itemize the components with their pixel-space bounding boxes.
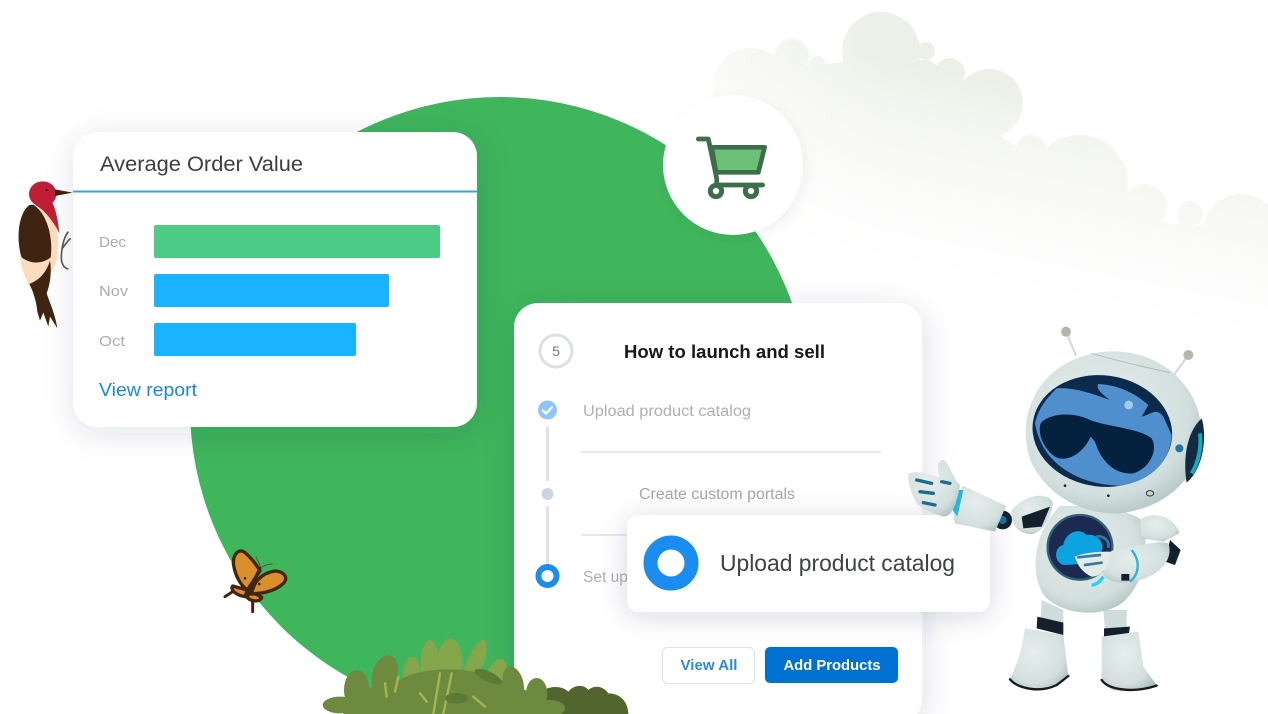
bar chart: Oct xyxy=(99,333,126,350)
robot raised arm xyxy=(908,460,1053,534)
bush xyxy=(323,638,628,714)
icon: butterfly xyxy=(225,551,286,612)
card title: Average Order Value xyxy=(100,153,303,176)
robot antennas xyxy=(1061,327,1193,375)
timeline connector xyxy=(546,427,549,566)
robot body xyxy=(1036,506,1145,613)
button: add products: Add Products xyxy=(784,657,880,674)
button: view all: View All xyxy=(680,657,738,674)
robot mascot xyxy=(908,327,1204,691)
icon: completed step check xyxy=(538,400,557,420)
step: upload product catalog: Upload product catalog xyxy=(583,403,751,420)
bar chart: Dec xyxy=(99,234,126,251)
robot sunglasses xyxy=(1040,414,1154,473)
view report link: View report xyxy=(99,380,197,400)
background cloud xyxy=(726,12,1268,236)
step count badge xyxy=(540,335,572,367)
bar chart: Nov xyxy=(99,283,129,300)
robot ear xyxy=(1175,418,1204,483)
button: add products xyxy=(765,647,898,683)
icon: current step ring xyxy=(538,567,556,585)
green circle xyxy=(190,97,810,714)
icon: shopping cart badge xyxy=(663,95,803,235)
step: create custom portals: Create custom portals xyxy=(639,486,795,503)
callout: upload product catalog: Upload product catalog xyxy=(720,550,955,576)
panel heading: How to launch and sell xyxy=(624,342,825,362)
step count badge: 5 xyxy=(552,343,560,359)
step marker xyxy=(542,488,554,500)
robot legs xyxy=(1010,600,1157,691)
panel: how to launch and sell xyxy=(514,303,922,714)
robot lowered arm xyxy=(1075,515,1181,585)
robot head xyxy=(1026,351,1204,513)
callout: upload product catalog xyxy=(627,515,990,612)
robot visor xyxy=(1026,367,1179,495)
robot chest emblem xyxy=(1048,515,1112,580)
button: view all xyxy=(662,648,754,684)
bar chart xyxy=(99,225,440,356)
panel: average order value xyxy=(73,132,477,427)
step: set up: Set up xyxy=(583,569,628,586)
icon: woodpecker xyxy=(19,181,73,328)
